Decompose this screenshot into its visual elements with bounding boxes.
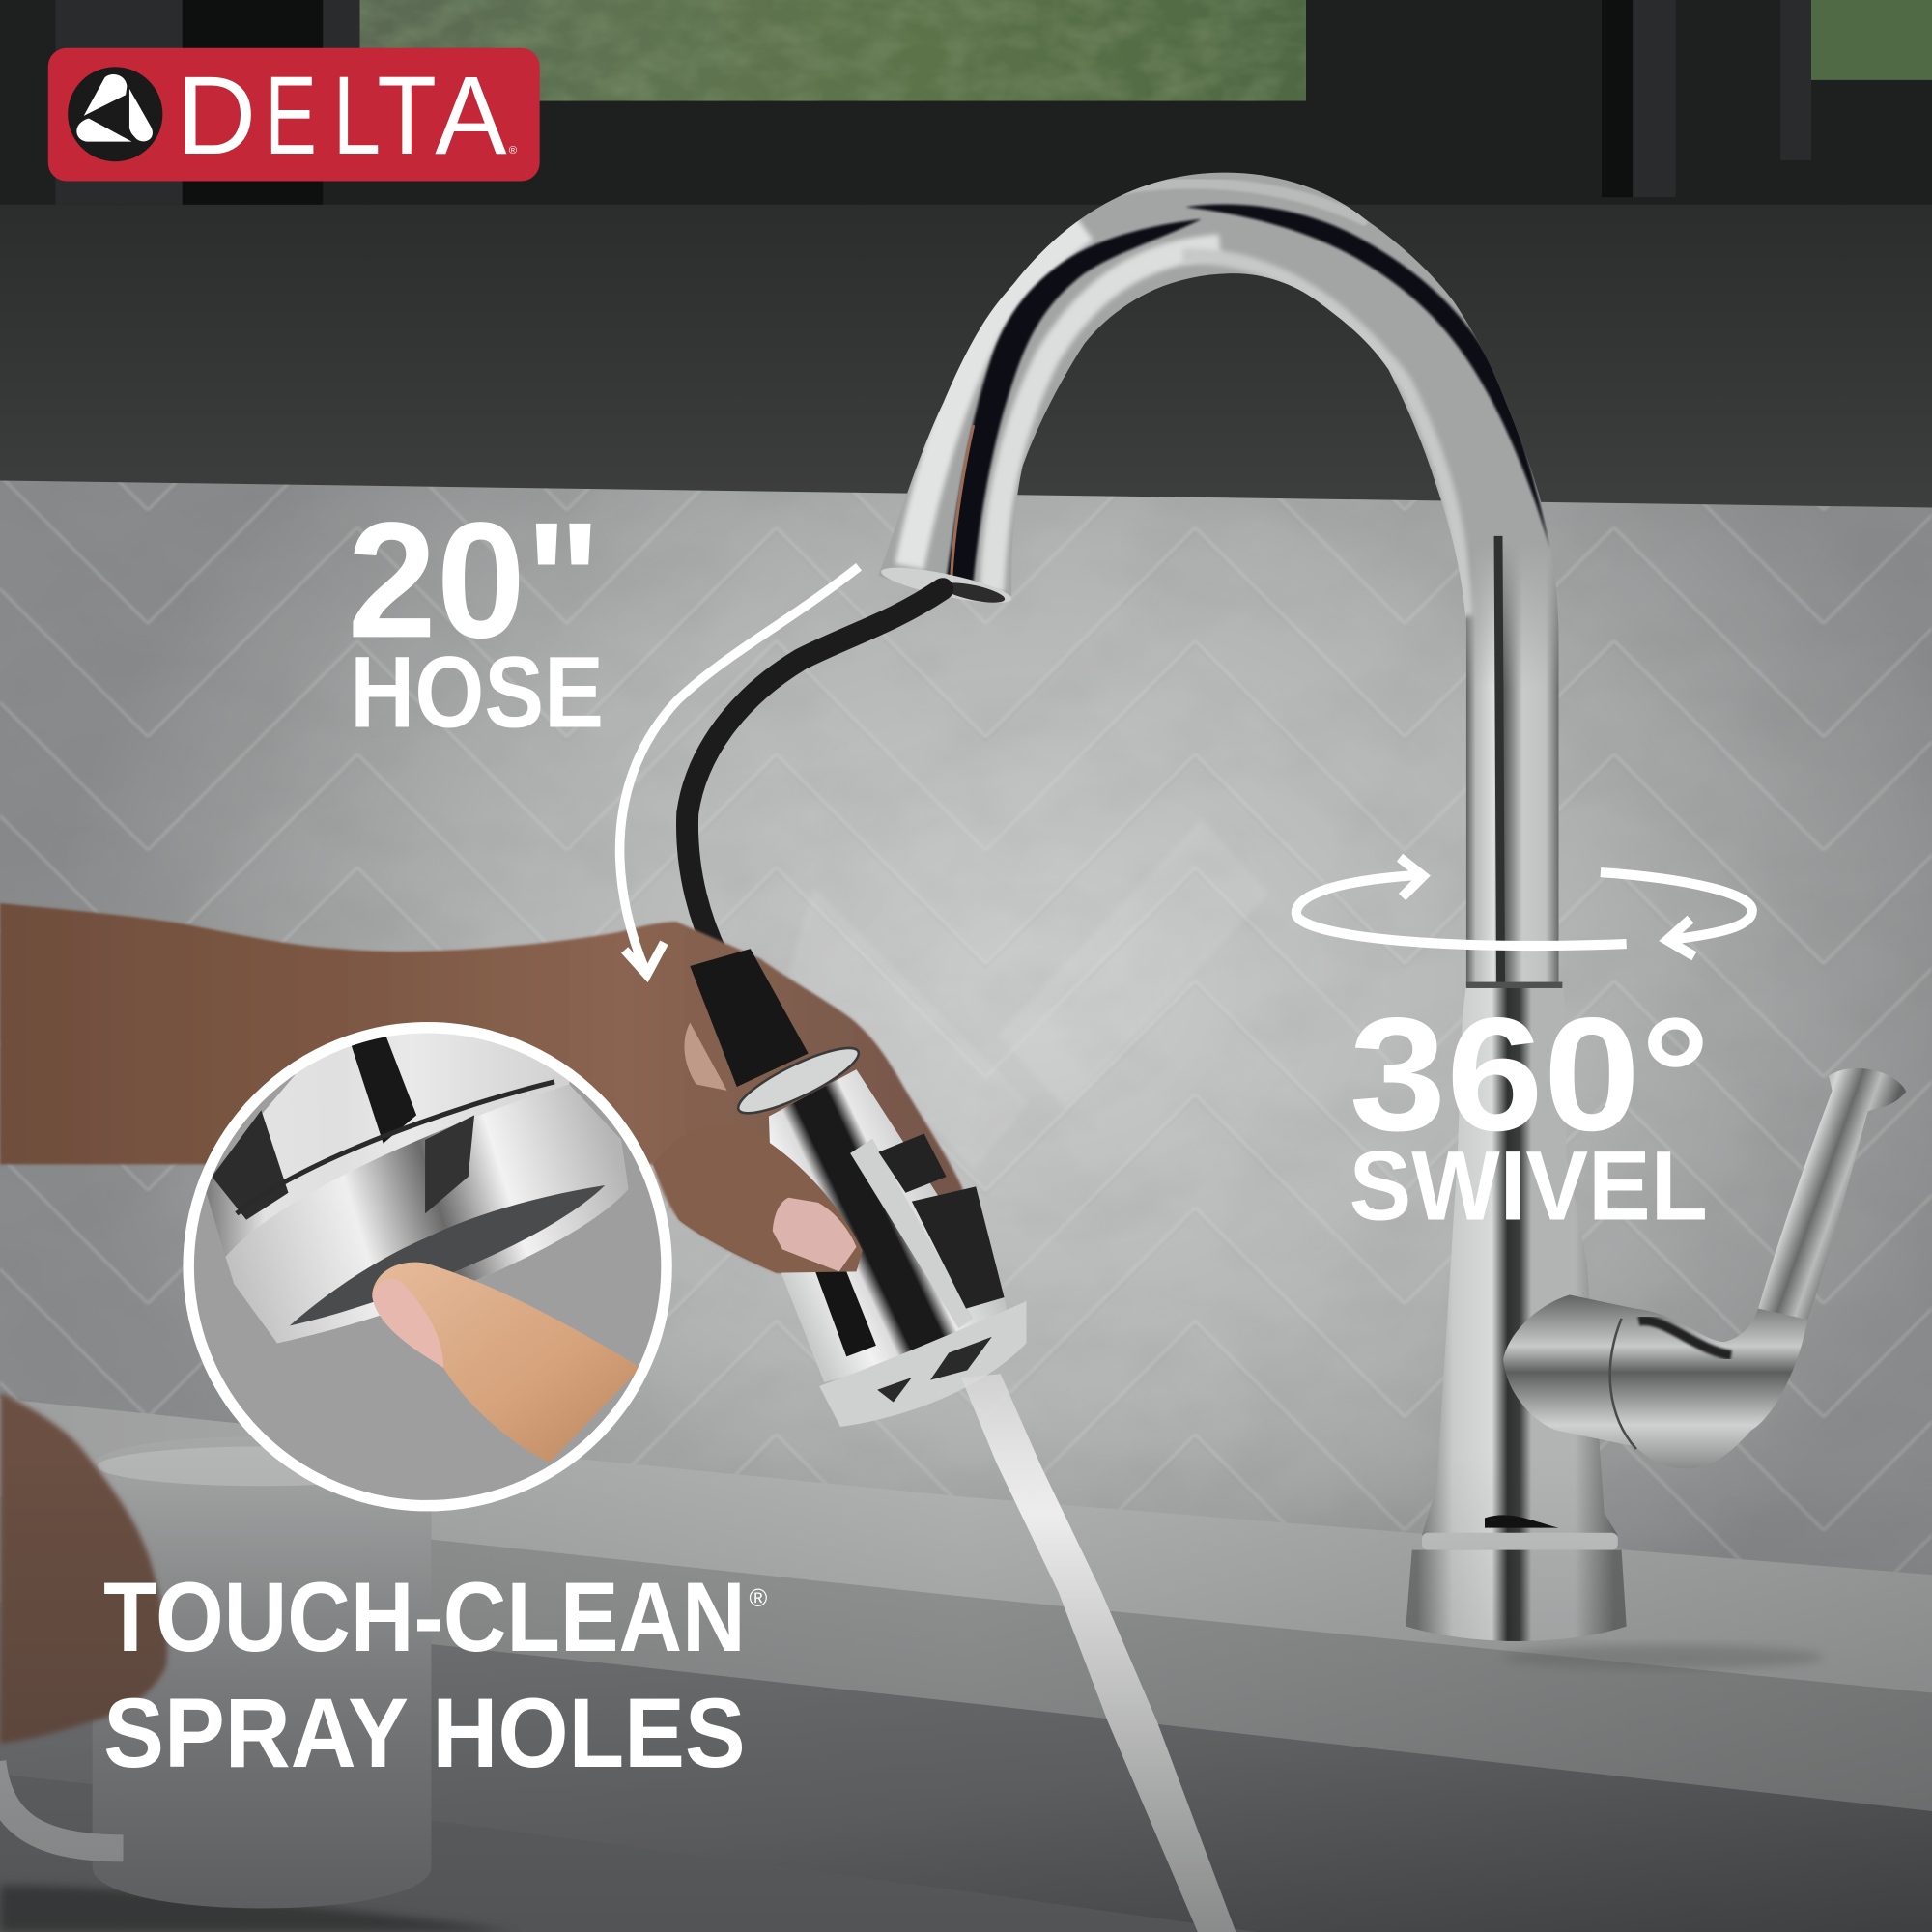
- window pane: greenery: [359, 0, 1306, 101]
- water stream: [961, 1374, 1236, 1932]
- label: 20 inch hose: HOSE: [350, 637, 604, 750]
- reflections on arch: [909, 228, 1084, 567]
- logo wordmark: E: [265, 53, 317, 177]
- fingernail: [773, 1198, 856, 1271]
- nozzle opening: [941, 579, 1007, 607]
- inset: touch-clean spray holes: [188, 1010, 667, 1506]
- label: 20 inch hose: 20": [348, 488, 601, 672]
- label: 360 degree swivel: [1350, 985, 1710, 1241]
- handle body: [1503, 1295, 1807, 1468]
- label: 20 inch hose: [348, 488, 604, 750]
- top collar: [731, 1037, 866, 1124]
- label: touch-clean spray holes: SPRAY HOLES: [103, 1678, 746, 1788]
- foreground shadow: [0, 1886, 518, 1932]
- spray buttons: [878, 1133, 1005, 1309]
- tile wall: [0, 474, 1932, 1583]
- faucet spout: [878, 173, 1560, 985]
- hose coupling: [690, 949, 809, 1087]
- window mullions: [55, 0, 1811, 205]
- sink floor: [0, 1775, 1257, 1932]
- spray face reflections: [877, 1337, 992, 1403]
- label: touch-clean spray holes: [103, 1562, 768, 1788]
- spout nozzle: [879, 560, 1013, 610]
- faucet shadow on counter: [1503, 1645, 1824, 1669]
- logo wordmark: D: [176, 54, 256, 178]
- faucet base and body: [1406, 982, 1627, 1641]
- label: 360 degree swivel: 360°: [1350, 985, 1710, 1165]
- label: touch-clean spray holes: TOUCH-CLEAN: [103, 1562, 746, 1672]
- dark soffit band: [0, 197, 1932, 508]
- coffee mug: [0, 1436, 431, 1908]
- logo wordmark: A: [435, 53, 507, 177]
- bottom shadow: [0, 1454, 1932, 1932]
- chrome sprayer close-up: [203, 1010, 629, 1343]
- second hand holding mug: [0, 1392, 167, 1744]
- wand lower black reflection: [814, 1269, 876, 1356]
- sink wall: [0, 1602, 1932, 1932]
- pull-down hose: [687, 589, 943, 955]
- button frame: [850, 1139, 974, 1328]
- window frame: [0, 0, 1932, 205]
- window pane: right greenery: [1811, 0, 1932, 80]
- label: 360 degree swivel: SWIVEL: [1350, 1131, 1708, 1241]
- handle lever: [1758, 1068, 1906, 1320]
- spray head: [653, 949, 1026, 1427]
- index finger over wand: [653, 1124, 863, 1273]
- chrome wand body: [769, 1069, 1010, 1382]
- forearm and hand: [0, 903, 974, 1275]
- label: touch-clean spray holes: ®: [750, 1585, 768, 1612]
- arrow: swivel rotation: [1296, 858, 1752, 956]
- spray face rim: [819, 1301, 1026, 1427]
- palm highlight: [684, 1023, 727, 1091]
- logo wordmark: L: [332, 53, 381, 177]
- logo wordmark: [176, 53, 507, 178]
- counter top: [0, 1399, 1932, 1693]
- faucet handle: [1503, 1068, 1906, 1468]
- logo wordmark: T: [377, 53, 437, 177]
- arrow: hose length: [620, 567, 859, 975]
- fingertip: [372, 1263, 640, 1463]
- Delta logo: ®: [509, 145, 518, 156]
- logo mark: [68, 67, 162, 161]
- dark mullion shadows: [183, 0, 1633, 205]
- counter front lip: [0, 1497, 1932, 1811]
- Delta logo: [48, 48, 540, 181]
